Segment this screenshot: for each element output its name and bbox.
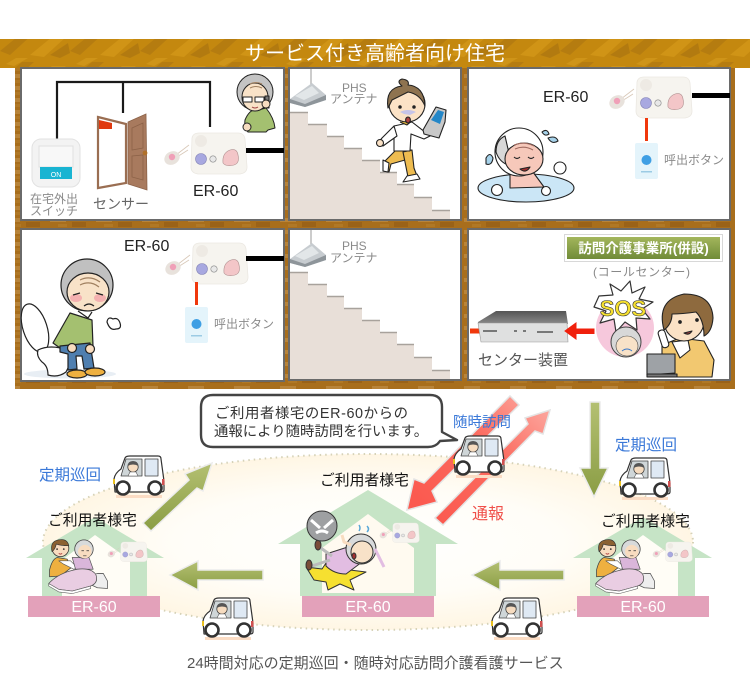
thick cable [246,256,284,261]
label: call button: 呼出ボタン [664,153,724,167]
label bar: ER-60 center: ER-60 [345,599,391,616]
label: right home: ご利用者様宅 [601,513,690,530]
illustration: fallen resident [306,511,384,590]
icon: PHS antenna [290,69,326,107]
red cable [645,118,648,141]
house: center [278,490,458,596]
car: top right [619,458,670,500]
label bar: ER-60 right: ER-60 [620,599,666,616]
label: ER-60: ER-60 [124,238,169,255]
car: emergency visit [453,436,504,478]
icon: call button [185,307,208,343]
panel: bathing resident [468,68,730,220]
label: scheduled patrol right: 定期巡回 [615,436,677,454]
panel: room with switch, door sensor and ER-60 [21,68,284,220]
wood frame [15,66,735,389]
arrow: scheduled patrol down [580,402,608,497]
service area ellipse [43,454,693,630]
label: call center: (コールセンター) [593,265,690,279]
arrow: scheduled patrol up-right [143,463,212,531]
label: center home: ご利用者様宅 [320,472,409,489]
label: emergency visit: 随時訪問 [453,414,511,431]
device: left home [106,542,147,562]
label: sensor: センサー [93,196,149,212]
icon: PHS antenna [290,230,326,267]
label: outing switch: 在宅外出 [30,192,78,206]
label bar: ER-60 left: ER-60 [71,599,117,616]
callout: ご利用者様宅のER-60からの [215,405,408,422]
label: left home: ご利用者様宅 [48,512,137,529]
label bar: ER-60 left [28,596,160,617]
label: visiting care office: 訪問介護事業所(併設) [578,240,709,256]
arrow: alert report [435,410,550,525]
panel: staff walking stairs [289,68,461,220]
car: bottom left [202,598,254,640]
illustration: operator on phone [647,294,714,377]
label: PHS antenna: PHS [342,81,367,95]
house: right [573,517,712,596]
staircase [290,112,450,219]
panel: call center [468,229,730,380]
device: ER-60 [163,243,248,284]
panel: resident in toilet [16,229,284,381]
thick cable [692,93,730,98]
illustration: staff with handset [376,79,446,182]
label: ER-60: ER-60 [193,183,238,200]
label: PHS antenna: PHS [342,239,367,253]
label: call button: 呼出ボタン [214,317,274,331]
heading band [0,39,750,68]
label bar: ER-60 center [302,596,434,617]
red cable [195,282,198,305]
label: outing switch: スイッチ [30,204,78,218]
icon: call button [635,143,658,179]
callout [201,395,457,447]
device: center home [378,523,419,543]
icon: door with sensor [98,114,147,190]
arrow: emergency visit [407,396,519,510]
label: report: 通報 [472,505,504,523]
illustration: elderly man on phone [237,74,275,132]
staircase [290,272,450,379]
panel: empty stairs [289,229,461,380]
heading text: サービス付き高齢者向け住宅 [245,42,505,65]
illustration: SOS alert: SOS [600,296,646,321]
label: scheduled patrol left: 定期巡回 [39,466,101,484]
icon: outing switch: ON [51,172,61,179]
caption: 24時間対応の定期巡回・随時対応訪問介護看護サービス [187,655,564,672]
device: ER-60 [162,133,247,174]
car: bottom right [491,598,542,640]
arrow: scheduled patrol left 2 [472,561,564,590]
label bar: ER-60 right [577,596,709,617]
label: PHS antenna: アンテナ [330,251,378,265]
label: center unit: センター装置 [478,352,568,369]
label: ER-60: ER-60 [543,89,588,106]
device: ER-60 [607,77,692,118]
device: right home [651,542,692,562]
illustration: care at left home [49,540,107,594]
house: left [26,517,164,596]
illustration: care at right home [596,540,654,594]
wiring [57,82,210,140]
icon: outing switch [32,139,80,187]
thick cable [246,148,284,153]
arrow: scheduled patrol left 1 [170,561,263,590]
illustration: man on toilet [16,259,121,378]
callout: 通報により随時訪問を行います。 [214,423,428,440]
arrow: center unit input [565,323,594,339]
icon: center unit [470,311,568,342]
illustration: SOS alert [594,281,654,357]
illustration: man in bath [478,128,574,202]
car: top left [113,456,164,498]
label: visiting care office [564,234,722,262]
label: PHS antenna: アンテナ [330,92,378,106]
